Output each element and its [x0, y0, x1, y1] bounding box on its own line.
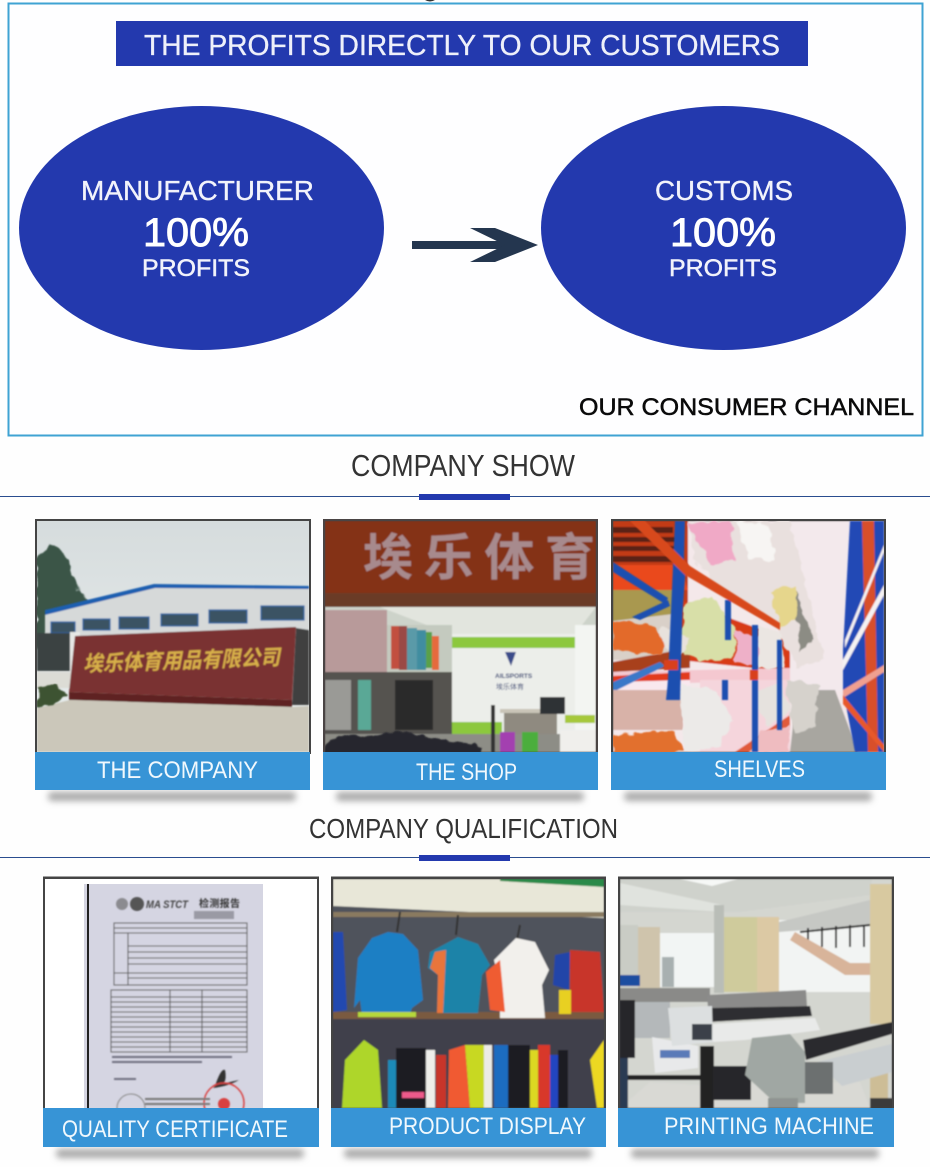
caption bar: the shop: THE SHOP [416, 759, 517, 786]
caption bar: the shop [323, 752, 598, 790]
ellipse: customs 100% profits: PROFITS [669, 255, 777, 282]
card: the company [35, 519, 311, 801]
photo: test report document: 检测报告 [199, 897, 240, 910]
panel: consumer channel [8, 4, 922, 436]
card: printing machine [618, 876, 894, 1158]
caption bar: quality certificate [43, 1108, 319, 1147]
heading: company show: COMPANY SHOW [351, 448, 576, 483]
heading: the profits directly to our customers [116, 21, 808, 66]
card: shelves [611, 519, 886, 801]
photo: shop front with glass door: 埃乐体育 [496, 682, 524, 691]
photo: factory and red sign wall: 埃乐体育用品有限公司 [83, 645, 283, 676]
photo: shop front with glass door: AILSPORTS [495, 673, 533, 680]
caption: our consumer channel: OUR CONSUMER CHANNEL [579, 394, 914, 421]
caption bar: product display [331, 1108, 606, 1147]
photo: large-format printers in workshop [620, 879, 892, 1108]
heading: company show [0, 448, 930, 500]
ellipse: customs 100% profits: CUSTOMS [655, 175, 793, 206]
lower rack of jerseys [342, 1040, 382, 1108]
caption bar: printing machine: PRINTING MACHINE [664, 1113, 874, 1140]
white jersey [494, 938, 549, 1018]
teal jersey [428, 937, 490, 1013]
photo: test report document: MA STCT [146, 899, 189, 911]
photo: shop front with glass door: 埃乐体育 [363, 530, 595, 586]
photo: shop front with glass door [325, 521, 596, 756]
ellipse: customs 100% profits [541, 106, 906, 350]
heading: the profits directly to our customers: THE PROFITS DIRECTLY TO OUR CUSTOMERS [144, 30, 780, 62]
caption bar: shelves [611, 752, 886, 790]
heading: company qualification: COMPANY QUALIFICATION [309, 813, 618, 844]
photo: test report document [45, 879, 317, 1123]
caption bar: shelves: SHELVES [714, 756, 805, 783]
heading: company qualification [0, 813, 930, 861]
ellipse: manufacturer 100% profits: 100% [143, 211, 249, 255]
caption bar: the company: THE COMPANY [97, 757, 258, 784]
caption bar: printing machine [618, 1108, 894, 1147]
photo: fabric rolls on warehouse shelves [613, 521, 884, 756]
caption bar: the company [35, 752, 310, 790]
card: product display [331, 876, 606, 1158]
photo: jerseys on display wall [333, 879, 604, 1108]
caption bar: quality certificate: QUALITY CERTIFICATE [62, 1116, 288, 1143]
ellipse: manufacturer 100% profits [19, 106, 384, 350]
ellipse: manufacturer 100% profits: MANUFACTURER [81, 175, 314, 206]
card: quality certificate [43, 876, 319, 1158]
card: the shop [323, 519, 598, 801]
red and yellow jerseys [570, 950, 604, 1012]
ellipse: customs 100% profits: 100% [670, 211, 776, 255]
arrow: manufacturer to customs [412, 228, 538, 262]
blue long-sleeve jersey [354, 932, 423, 1015]
ellipse: manufacturer 100% profits: PROFITS [142, 255, 250, 282]
caption bar: product display: PRODUCT DISPLAY [389, 1113, 586, 1140]
photo: factory and red sign wall [37, 521, 309, 752]
